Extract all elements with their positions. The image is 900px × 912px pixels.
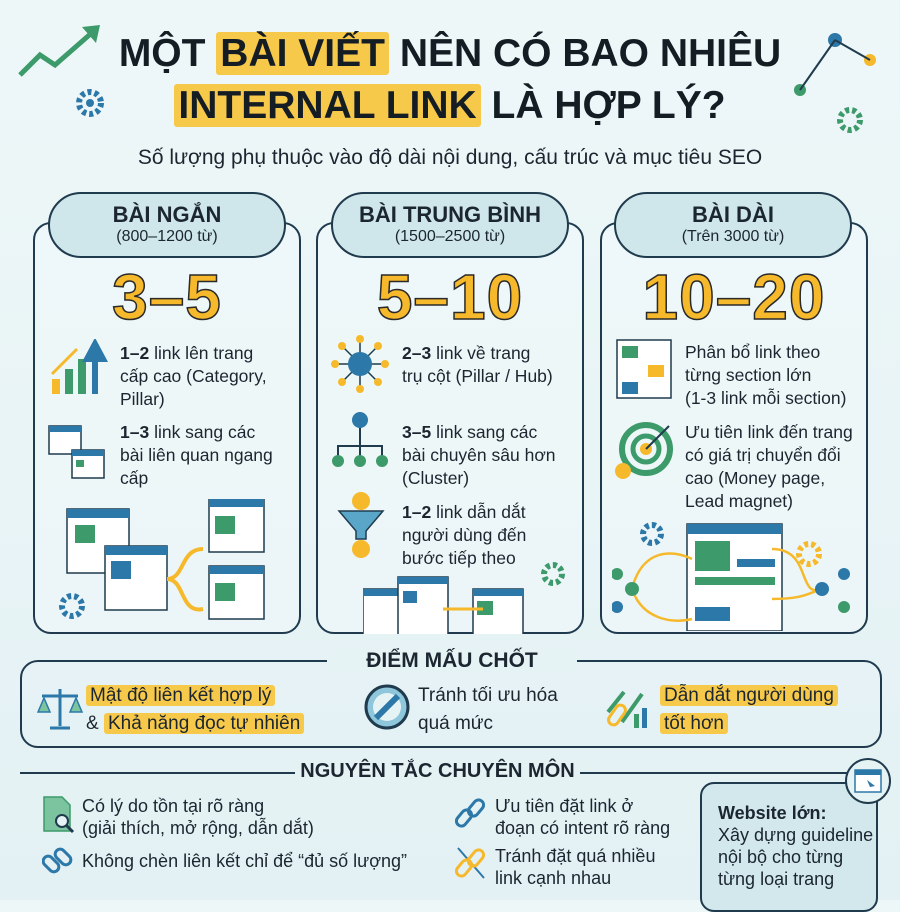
text: intent placement bbox=[495, 796, 670, 838]
illustration: linked document bbox=[612, 522, 850, 631]
text: 3-5 link: bài chuyên sâu hơn bbox=[402, 445, 556, 465]
callout: large websites: từng loại trang bbox=[718, 869, 834, 889]
text: 1-2 link lead: bước tiếp theo bbox=[402, 548, 516, 568]
text: avoid clustering bbox=[495, 846, 655, 888]
text: 1-2 link lead: 1–2 link dẫn dắt bbox=[402, 502, 526, 522]
text: priority: Ưu tiên link đến trang bbox=[685, 422, 853, 442]
header pill: long bbox=[614, 192, 852, 258]
text: 1-2 link lead: người dùng đến bbox=[402, 525, 526, 545]
title bbox=[119, 31, 781, 127]
icon: sections doc bbox=[616, 339, 672, 399]
callout: large websites: Website lớn: bbox=[718, 803, 826, 823]
text: 1-3 link: bài liên quan ngang bbox=[120, 445, 273, 465]
text: 2-3 link: trụ cột (Pillar / Hub) bbox=[402, 366, 553, 386]
text: intent placement: Ưu tiên đặt link ở bbox=[495, 796, 633, 816]
icon: broken link bbox=[42, 848, 72, 874]
header pill: medium bbox=[331, 192, 569, 258]
panel: key points bbox=[20, 660, 882, 748]
text: distribute: Phân bổ link theo bbox=[685, 342, 820, 362]
heading: key points bbox=[327, 649, 577, 673]
text: 1-2 link: Pillar) bbox=[120, 389, 165, 409]
text: density: & Khả năng đọc tự nhiên bbox=[86, 713, 300, 734]
text: 1-2 link: 1–2 link lên trang bbox=[120, 343, 253, 363]
icon: browser cursor bbox=[845, 758, 891, 804]
heading: professional principles: NGUYÊN TẮC CHUYÊN MÔN bbox=[300, 760, 575, 782]
text: guide users: tốt hơn bbox=[664, 713, 724, 734]
icon: gear bbox=[541, 562, 565, 586]
text: priority: cao (Money page, bbox=[685, 468, 825, 488]
text: density: Mật độ liên kết hợp lý bbox=[90, 685, 271, 706]
callout: large websites: Xây dựng guideline bbox=[718, 825, 873, 845]
text: guide users bbox=[660, 684, 838, 734]
panel: long article bbox=[600, 222, 868, 634]
text: 3-5 link bbox=[402, 422, 556, 488]
icon: link chain yellow bbox=[455, 847, 486, 879]
icon: growth chain bbox=[606, 690, 647, 728]
text: 1-3 link: cấp bbox=[120, 468, 148, 488]
text: 1-3 link: 1–3 link sang các bbox=[120, 422, 255, 442]
text: clear reason bbox=[82, 796, 314, 838]
text: avoid over-optimization: Tránh tối ưu hóa bbox=[418, 685, 558, 706]
text: avoid clustering: link cạnh nhau bbox=[495, 868, 611, 888]
text: 1-2 link bbox=[120, 343, 267, 409]
header pill: short bbox=[48, 192, 286, 258]
text: avoid clustering: Tránh đặt quá nhiều bbox=[495, 846, 655, 866]
header pill: long: BÀI DÀI bbox=[692, 202, 774, 227]
callout: large websites bbox=[700, 782, 878, 912]
text: intent placement: đoạn có intent rõ ràng bbox=[495, 818, 670, 838]
text: density bbox=[86, 685, 304, 734]
text: priority bbox=[685, 422, 853, 511]
icon: network top-right bbox=[794, 33, 876, 133]
icon: pages swap bbox=[48, 425, 105, 479]
text: distribute: (1-3 link mỗi section) bbox=[685, 388, 846, 408]
big number: 3–5 bbox=[112, 261, 222, 333]
text: 1-2 link lead bbox=[402, 502, 526, 568]
panel: short article bbox=[33, 222, 301, 634]
text: no filler links: Không chèn liên kết chỉ để “đủ số lượng” bbox=[82, 851, 407, 871]
text: priority: Lead magnet) bbox=[685, 491, 793, 511]
icon: scale bbox=[36, 689, 84, 730]
icon: hub bbox=[331, 335, 389, 393]
text: 1-2 link: cấp cao (Category, bbox=[120, 366, 267, 386]
header pill: medium: BÀI TRUNG BÌNH bbox=[359, 202, 541, 227]
text: distribute: từng section lớn bbox=[685, 365, 811, 385]
panel: medium article bbox=[316, 222, 584, 634]
big number: 10–20 bbox=[643, 261, 825, 333]
icon: tree bbox=[332, 412, 388, 467]
icon: growth arrow top-left bbox=[18, 25, 104, 117]
title: MỘT BÀI VIẾT NÊN CÓ BAO NHIÊU bbox=[119, 32, 781, 75]
text: 3-5 link: 3–5 link sang các bbox=[402, 422, 537, 442]
subtitle: Số lượng phụ thuộc vào độ dài nội dung, cấu trúc và mục tiêu SEO bbox=[138, 146, 762, 169]
icon: bar chart bbox=[51, 339, 108, 394]
text: 2-3 link: 2–3 link về trang bbox=[402, 343, 530, 363]
text: clear reason: (giải thích, mở rộng, dẫn dắt) bbox=[82, 818, 314, 838]
heading: key points: ĐIỂM MẤU CHỐT bbox=[366, 649, 538, 672]
icon: document search bbox=[43, 796, 74, 833]
text: priority: có giá trị chuyển đổi bbox=[685, 445, 841, 465]
text: avoid over-optimization bbox=[418, 685, 558, 734]
text: 2-3 link bbox=[402, 343, 553, 386]
callout: large websites: nội bộ cho từng bbox=[718, 847, 843, 867]
header pill: short: BÀI NGẮN bbox=[113, 202, 221, 227]
text: 1-3 link bbox=[120, 422, 273, 488]
illustration: page branches bbox=[59, 499, 265, 620]
header pill: medium: (1500–2500 từ) bbox=[395, 228, 505, 245]
big number: 5–10 bbox=[377, 261, 523, 333]
icon: funnel bbox=[338, 492, 384, 558]
icon: target bbox=[615, 422, 673, 479]
text: clear reason: Có lý do tồn tại rõ ràng bbox=[82, 796, 264, 816]
icon: prohibited bbox=[364, 684, 410, 730]
text: 3-5 link: (Cluster) bbox=[402, 468, 469, 488]
icon: link chain blue bbox=[455, 798, 486, 828]
header pill: short: (800–1200 từ) bbox=[116, 228, 218, 245]
text: distribute bbox=[685, 342, 846, 408]
illustration: pages chain bbox=[363, 576, 524, 634]
text: guide users: Dẫn dắt người dùng bbox=[664, 685, 834, 706]
title: INTERNAL LINK LÀ HỢP LÝ? bbox=[178, 84, 726, 127]
header pill: long: (Trên 3000 từ) bbox=[682, 228, 784, 245]
text: avoid over-optimization: quá mức bbox=[418, 713, 493, 734]
